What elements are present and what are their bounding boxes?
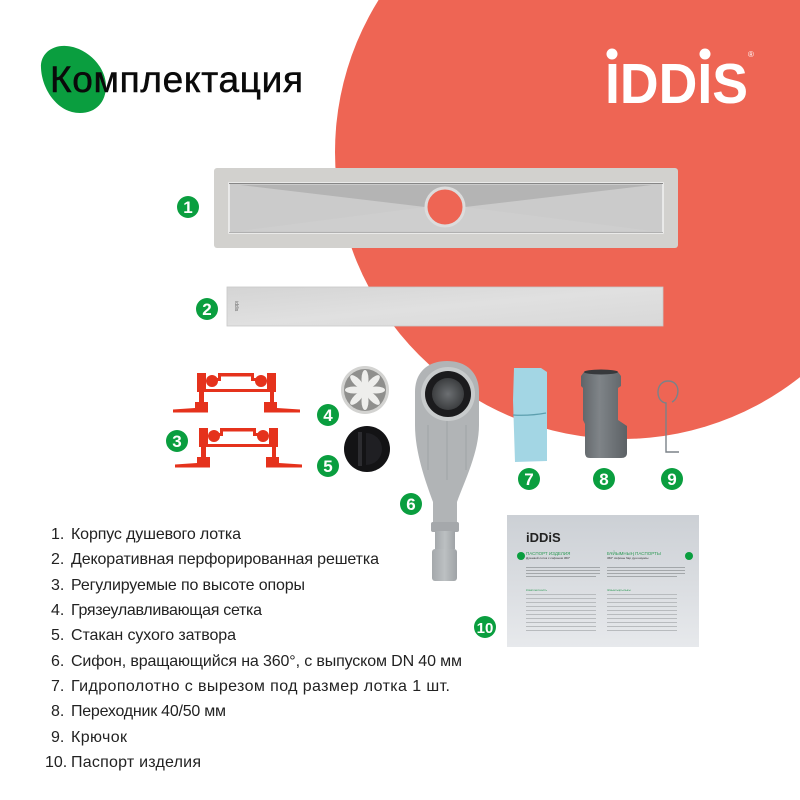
item 2: decorative grate: iddis xyxy=(233,301,239,312)
numbered list: Сифон, вращающийся на 360°, с выпуском DN 40 мм xyxy=(71,653,462,670)
numbered list: 7. xyxy=(51,678,64,695)
item 10: product passport: ПАСПОРТ ИЗДЕЛИЯ xyxy=(526,551,570,556)
number badges: 2 xyxy=(202,300,212,319)
number badges: 4 xyxy=(323,406,333,425)
green title blob xyxy=(41,46,106,113)
number badges: 7 xyxy=(524,470,534,489)
item 10: product passport: Душевой лоток с сифоном 360° xyxy=(526,556,571,560)
numbered list: 4. xyxy=(51,602,64,619)
item 9: hook xyxy=(658,381,679,452)
numbered list: Декоративная перфорированная решетка xyxy=(71,551,379,568)
item 1: drain channel body xyxy=(214,168,678,248)
numbered list: 9. xyxy=(51,729,64,746)
numbered list: Грязеулавливающая сетка xyxy=(71,602,262,619)
item 10: product passport: 360° сифоны бар душ науасы xyxy=(607,556,648,560)
number badges: 9 xyxy=(667,470,677,489)
IDDIS logo: ® xyxy=(748,50,754,59)
numbered list: 6. xyxy=(51,653,64,670)
numbered list xyxy=(45,526,462,771)
numbered list: 10. xyxy=(45,754,67,771)
item 10: product passport xyxy=(507,515,699,647)
item 10: product passport: БҰЙЫМНЫҢ ПАСПОРТЫ xyxy=(607,549,661,556)
numbered list: 2. xyxy=(51,551,64,568)
item 8: adapter 40/50 xyxy=(581,370,627,458)
item 2: decorative grate xyxy=(227,287,663,326)
red background circle xyxy=(335,0,800,439)
numbered list: Корпус душевого лотка xyxy=(71,526,241,543)
numbered list: Крючок xyxy=(71,729,128,746)
IDDIS logo: IDDIS xyxy=(605,52,748,116)
item 10: product passport: Жиынтықтылығы xyxy=(607,588,631,592)
number badges: 3 xyxy=(172,432,182,451)
item 3: adjustable supports xyxy=(173,373,302,468)
numbered list: 3. xyxy=(51,577,64,594)
upper support xyxy=(173,373,300,412)
number badges: 8 xyxy=(599,470,609,489)
numbered list: 1. xyxy=(51,526,64,543)
item 7: waterproofing sheet xyxy=(513,368,547,462)
item 4: dirt-catching mesh xyxy=(341,366,389,414)
numbered list: 5. xyxy=(51,627,64,644)
number badges: 10 xyxy=(477,620,493,637)
item 10: product passport: Комплектность xyxy=(526,588,547,592)
title: Комплектация xyxy=(50,59,303,100)
number badges: 1 xyxy=(183,198,193,217)
item 5: dry trap cup xyxy=(344,426,390,472)
item 10: product passport: iDDiS xyxy=(526,530,561,545)
numbered list: 8. xyxy=(51,703,64,720)
number badges: 5 xyxy=(323,457,333,476)
numbered list: Переходник 40/50 мм xyxy=(71,703,226,720)
number badges xyxy=(166,196,683,638)
number badges: 6 xyxy=(406,495,416,514)
numbered list: Паспорт изделия xyxy=(71,754,201,771)
numbered list: Регулируемые по высоте опоры xyxy=(71,577,305,594)
numbered list: Гидрополотно с вырезом под размер лотка 1 шт. xyxy=(71,678,450,695)
item 6: siphon xyxy=(415,361,479,581)
lower support xyxy=(175,428,302,468)
numbered list: Стакан сухого затвора xyxy=(71,627,236,644)
